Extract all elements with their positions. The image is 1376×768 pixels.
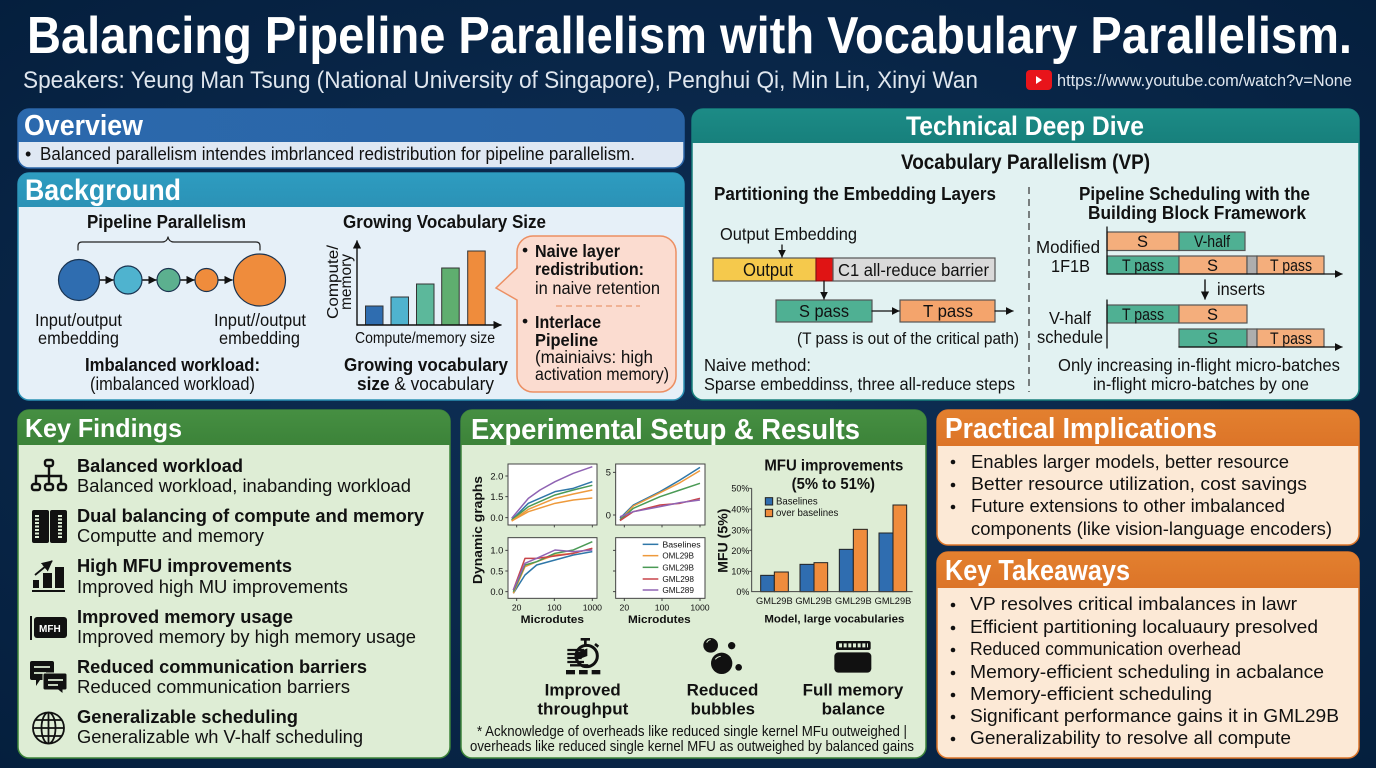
finding: balanced workload (32, 456, 411, 496)
finding: reduced communication: Reduced communication barriers (77, 657, 367, 677)
finding: generalizable scheduling: Generalizable scheduling (77, 707, 298, 727)
line charts: dynamic graphs: 2.0 (490, 471, 503, 481)
heading: background: Background (25, 174, 181, 207)
callout: naive redistribution: Interlace (535, 312, 601, 332)
line charts: dynamic graphs: 100 (547, 603, 562, 613)
diagram: pipeline scheduling: schedule (1037, 327, 1103, 347)
heading: practical implications: Practical Implications (945, 413, 1217, 445)
diagram: pipeline parallelism (35, 211, 306, 394)
diagram: pipeline parallelism: Imbalanced workload: (85, 354, 260, 375)
chart: growing vocabulary size (325, 211, 546, 394)
callout: naive redistribution: Naive layer (535, 241, 620, 261)
bar chart: mfu improvements: GML29B (835, 596, 872, 606)
diagram: partitioning the embedding layers: (T pass is out of the critical path) (797, 330, 1019, 348)
footnote (470, 724, 914, 755)
implications list: Future extensions to other imbalanced (971, 495, 1285, 516)
heading: key takeaways: Key Takeaways (945, 555, 1130, 587)
line charts: dynamic graphs: 5 (606, 468, 611, 478)
diagram: partitioning the embedding layers: Output (743, 259, 793, 280)
bar chart: mfu improvements: 10% (731, 567, 749, 577)
takeaways list: Reduced communication overhead (970, 638, 1241, 659)
overview text: Balanced parallelism intendes imbrlanced redistribution for pipeline parallelism. (40, 144, 635, 164)
bar chart: mfu improvements: (5% to 51%) (792, 476, 875, 493)
panel: key takeaways (937, 552, 1359, 758)
speakers: Speakers: Yeung Man Tsung (National University of Singapore), Penghui Qi, Min Lin, Xinyi Wan (23, 67, 978, 94)
bar chart: mfu improvements: MFU (5%) (714, 508, 730, 573)
diagram: pipeline parallelism: Input//output (214, 310, 306, 330)
takeaways list: Generalizability to resolve all compute (970, 727, 1291, 748)
video link: https://www.youtube.com/watch?v=None (1057, 71, 1352, 90)
footnote: * Acknowledge of overheads like reduced single kernel MFu outweighed | (477, 724, 907, 740)
diagram: pipeline scheduling: Modified (1036, 237, 1100, 257)
bar chart: mfu improvements: 20% (731, 546, 749, 556)
finding: dual balancing (32, 506, 424, 546)
diagram: pipeline scheduling: in-flight micro-batches by one (1093, 374, 1309, 394)
diagram: pipeline scheduling: V-half (1194, 233, 1230, 251)
diagram: partitioning the embedding layers: Partitioning the Embedding Layers (714, 183, 996, 204)
callout: naive redistribution (496, 236, 676, 392)
bar chart: mfu improvements: over baselines (776, 508, 838, 519)
callout: naive redistribution: redistribution: (535, 259, 644, 279)
diagram: partitioning the embedding layers: S pass (799, 301, 849, 321)
result: improved throughput: Improved (545, 680, 621, 699)
result: reduced bubbles (687, 638, 758, 718)
line charts: dynamic graphs: 1.0 (490, 546, 503, 556)
diagram: partitioning the embedding layers: C1 all-reduce barrier (838, 260, 989, 280)
chart: growing vocabulary size: Compute/memory size (355, 330, 495, 347)
line charts: dynamic graphs: 0.0 (490, 513, 503, 523)
diagram: partitioning the embedding layers (704, 183, 1019, 394)
diagram: pipeline scheduling: T pass (1270, 330, 1312, 348)
finding: improved memory: Improved memory by high memory usage (77, 627, 416, 647)
diagram: pipeline parallelism: embedding (219, 328, 300, 348)
result: reduced bubbles: bubbles (691, 699, 755, 718)
subheading: vocabulary parallelism: Vocabulary Parallelism (VP) (901, 151, 1150, 174)
diagram: pipeline scheduling: V-half (1049, 308, 1091, 328)
line charts: dynamic graphs: Microdutes (628, 614, 691, 626)
diagram: partitioning the embedding layers: Sparse embeddinss, three all-reduce steps (704, 374, 1015, 394)
diagram: pipeline scheduling: S (1207, 306, 1218, 324)
finding: high mfu: Improved high MU improvements (77, 577, 348, 597)
diagram: partitioning the embedding layers: Output Embedding (720, 224, 857, 244)
panel: technical deep dive (692, 109, 1359, 400)
finding: reduced communication (30, 657, 367, 697)
chart: growing vocabulary size: Growing Vocabulary Size (343, 211, 546, 232)
line charts: dynamic graphs: 1000 (690, 603, 710, 613)
bar chart: mfu improvements: GML29B (795, 596, 832, 606)
implications list: Better resource utilization, cost savings (971, 473, 1307, 494)
diagram: pipeline scheduling: S (1207, 330, 1218, 348)
panel: background (18, 173, 684, 400)
finding: improved memory: MFH (39, 624, 61, 635)
diagram: pipeline scheduling: S (1207, 257, 1218, 275)
bar chart: mfu improvements: 30% (731, 525, 749, 535)
diagram: partitioning the embedding layers: Naive method: (704, 355, 811, 375)
result: full memory balance: balance (822, 699, 885, 718)
finding: dual balancing: Dual balancing of compute and memory (77, 506, 424, 526)
diagram: pipeline scheduling: 1F1B (1051, 256, 1090, 276)
finding: generalizable scheduling: Generalizable wh V-half scheduling (77, 727, 363, 747)
takeaways list: VP resolves critical imbalances in lawr (970, 593, 1297, 614)
diagram: pipeline scheduling: S (1137, 233, 1148, 251)
diagram: pipeline scheduling (1036, 183, 1342, 394)
result: improved throughput: throughput (537, 699, 629, 718)
diagram: pipeline scheduling: T pass (1270, 257, 1312, 275)
implications list: Enables larger models, better resource (971, 451, 1289, 472)
line charts: dynamic graphs (471, 464, 710, 626)
line charts: dynamic graphs: 20 (512, 603, 522, 613)
bar chart: mfu improvements: 0% (736, 587, 749, 597)
heading: key findings: Key Findings (25, 413, 182, 443)
line charts: dynamic graphs: OML29B (662, 551, 694, 561)
finding: reduced communication: Reduced communication barriers (77, 677, 350, 697)
diagram: pipeline scheduling: T pass (1122, 306, 1164, 324)
diagram: partitioning the embedding layers: T pass (923, 301, 973, 321)
chart: growing vocabulary size: Growing vocabulary (344, 354, 509, 375)
finding: balanced workload: Balanced workload (77, 456, 243, 476)
diagram: pipeline parallelism: Pipeline Parallelism (87, 211, 246, 232)
callout: naive redistribution: (mainiaivs: high (535, 347, 653, 367)
icon: youtube (1026, 70, 1052, 90)
line charts: dynamic graphs: Baselines (662, 539, 701, 549)
line charts: dynamic graphs: GML289 (662, 585, 694, 595)
line charts: dynamic graphs: Microdutes (521, 614, 584, 626)
line charts: dynamic graphs: 100 (655, 603, 669, 613)
heading: experimental setup: Experimental Setup & Results (471, 414, 860, 446)
takeaways list (951, 593, 1339, 748)
finding: improved memory: Improved memory usage (77, 607, 293, 627)
footnote: overheads like reduced single kernel MFU as outweighed by balanced gains (470, 739, 914, 755)
line charts: dynamic graphs: 1000 (583, 603, 602, 613)
chart: growing vocabulary size: memory (338, 254, 355, 310)
bar chart: mfu improvements: Model, large vocabularies (764, 614, 904, 626)
finding: high mfu: High MFU improvements (77, 556, 292, 576)
line charts: dynamic graphs: GML29B (662, 562, 694, 572)
line charts: dynamic graphs: 0 (606, 510, 611, 520)
heading: technical deep dive: Technical Deep Dive (906, 111, 1144, 141)
finding: balanced workload: Balanced workload, inabanding workload (77, 476, 411, 496)
result: full memory balance: Full memory (803, 680, 904, 699)
overview text: • (25, 144, 31, 164)
panel: overview (18, 109, 684, 168)
line charts: dynamic graphs: 0.5 (490, 566, 503, 576)
bar chart: mfu improvements (714, 458, 913, 626)
diagram: pipeline scheduling: Only increasing in-flight micro-batches (1058, 355, 1340, 375)
callout: naive redistribution: • (522, 240, 528, 260)
implications list: components (like vision-language encoders) (971, 518, 1332, 539)
bar chart: mfu improvements: MFU improvements (764, 458, 903, 475)
line charts: dynamic graphs: 0.0 (490, 587, 503, 597)
diagram: pipeline scheduling: inserts (1217, 279, 1265, 299)
bar chart: mfu improvements: 50% (731, 484, 749, 494)
takeaways list: Memory-efficient scheduling in acbalance (970, 661, 1324, 682)
diagram: pipeline parallelism: embedding (38, 328, 119, 348)
panel: practical implications (937, 410, 1359, 545)
diagram: pipeline parallelism: (imbalanced workload) (90, 373, 255, 394)
takeaways list: Memory-efficient scheduling (970, 683, 1212, 704)
callout: naive redistribution: in naive retention (535, 278, 660, 298)
takeaways list: Efficient partitioning localuaury presolved (970, 616, 1318, 637)
bar chart: mfu improvements: GML29B (756, 596, 793, 606)
bar chart: mfu improvements: Baselines (776, 497, 818, 508)
result: improved throughput (537, 639, 629, 718)
callout: naive redistribution: • (522, 311, 528, 331)
bar chart: mfu improvements: 40% (731, 504, 749, 514)
takeaways list: Significant performance gains it in GML29B (970, 705, 1339, 726)
result: reduced bubbles: Reduced (687, 680, 758, 699)
chart: growing vocabulary size: Compute/ (325, 244, 342, 319)
line charts: dynamic graphs: GML298 (662, 574, 694, 584)
diagram: pipeline scheduling: T pass (1122, 257, 1164, 275)
finding: high mfu (32, 556, 348, 597)
chart: growing vocabulary size: size & vocabulary (357, 373, 495, 394)
diagram: pipeline scheduling: Building Block Framework (1088, 202, 1307, 223)
panel: key findings (18, 410, 450, 758)
implications list (951, 451, 1332, 539)
callout: naive redistribution: activation memory) (535, 364, 669, 384)
line charts: dynamic graphs: 20 (620, 603, 629, 613)
finding: improved memory (31, 607, 416, 647)
diagram: pipeline parallelism: Input/output (35, 310, 122, 330)
line charts: dynamic graphs: 1.5 (490, 492, 503, 502)
bar chart: mfu improvements: GML29B (875, 596, 911, 606)
line charts: dynamic graphs: Dynamic graphs (471, 476, 485, 584)
callout: naive redistribution: Pipeline (535, 330, 598, 350)
heading: overview: Overview (24, 110, 143, 142)
diagram: pipeline scheduling: Pipeline Scheduling with the (1079, 183, 1310, 204)
result: full memory balance (803, 641, 904, 718)
finding: dual balancing: Computte and memory (77, 526, 264, 546)
panel: experimental setup and results (461, 410, 926, 758)
finding: generalizable scheduling (33, 707, 363, 747)
